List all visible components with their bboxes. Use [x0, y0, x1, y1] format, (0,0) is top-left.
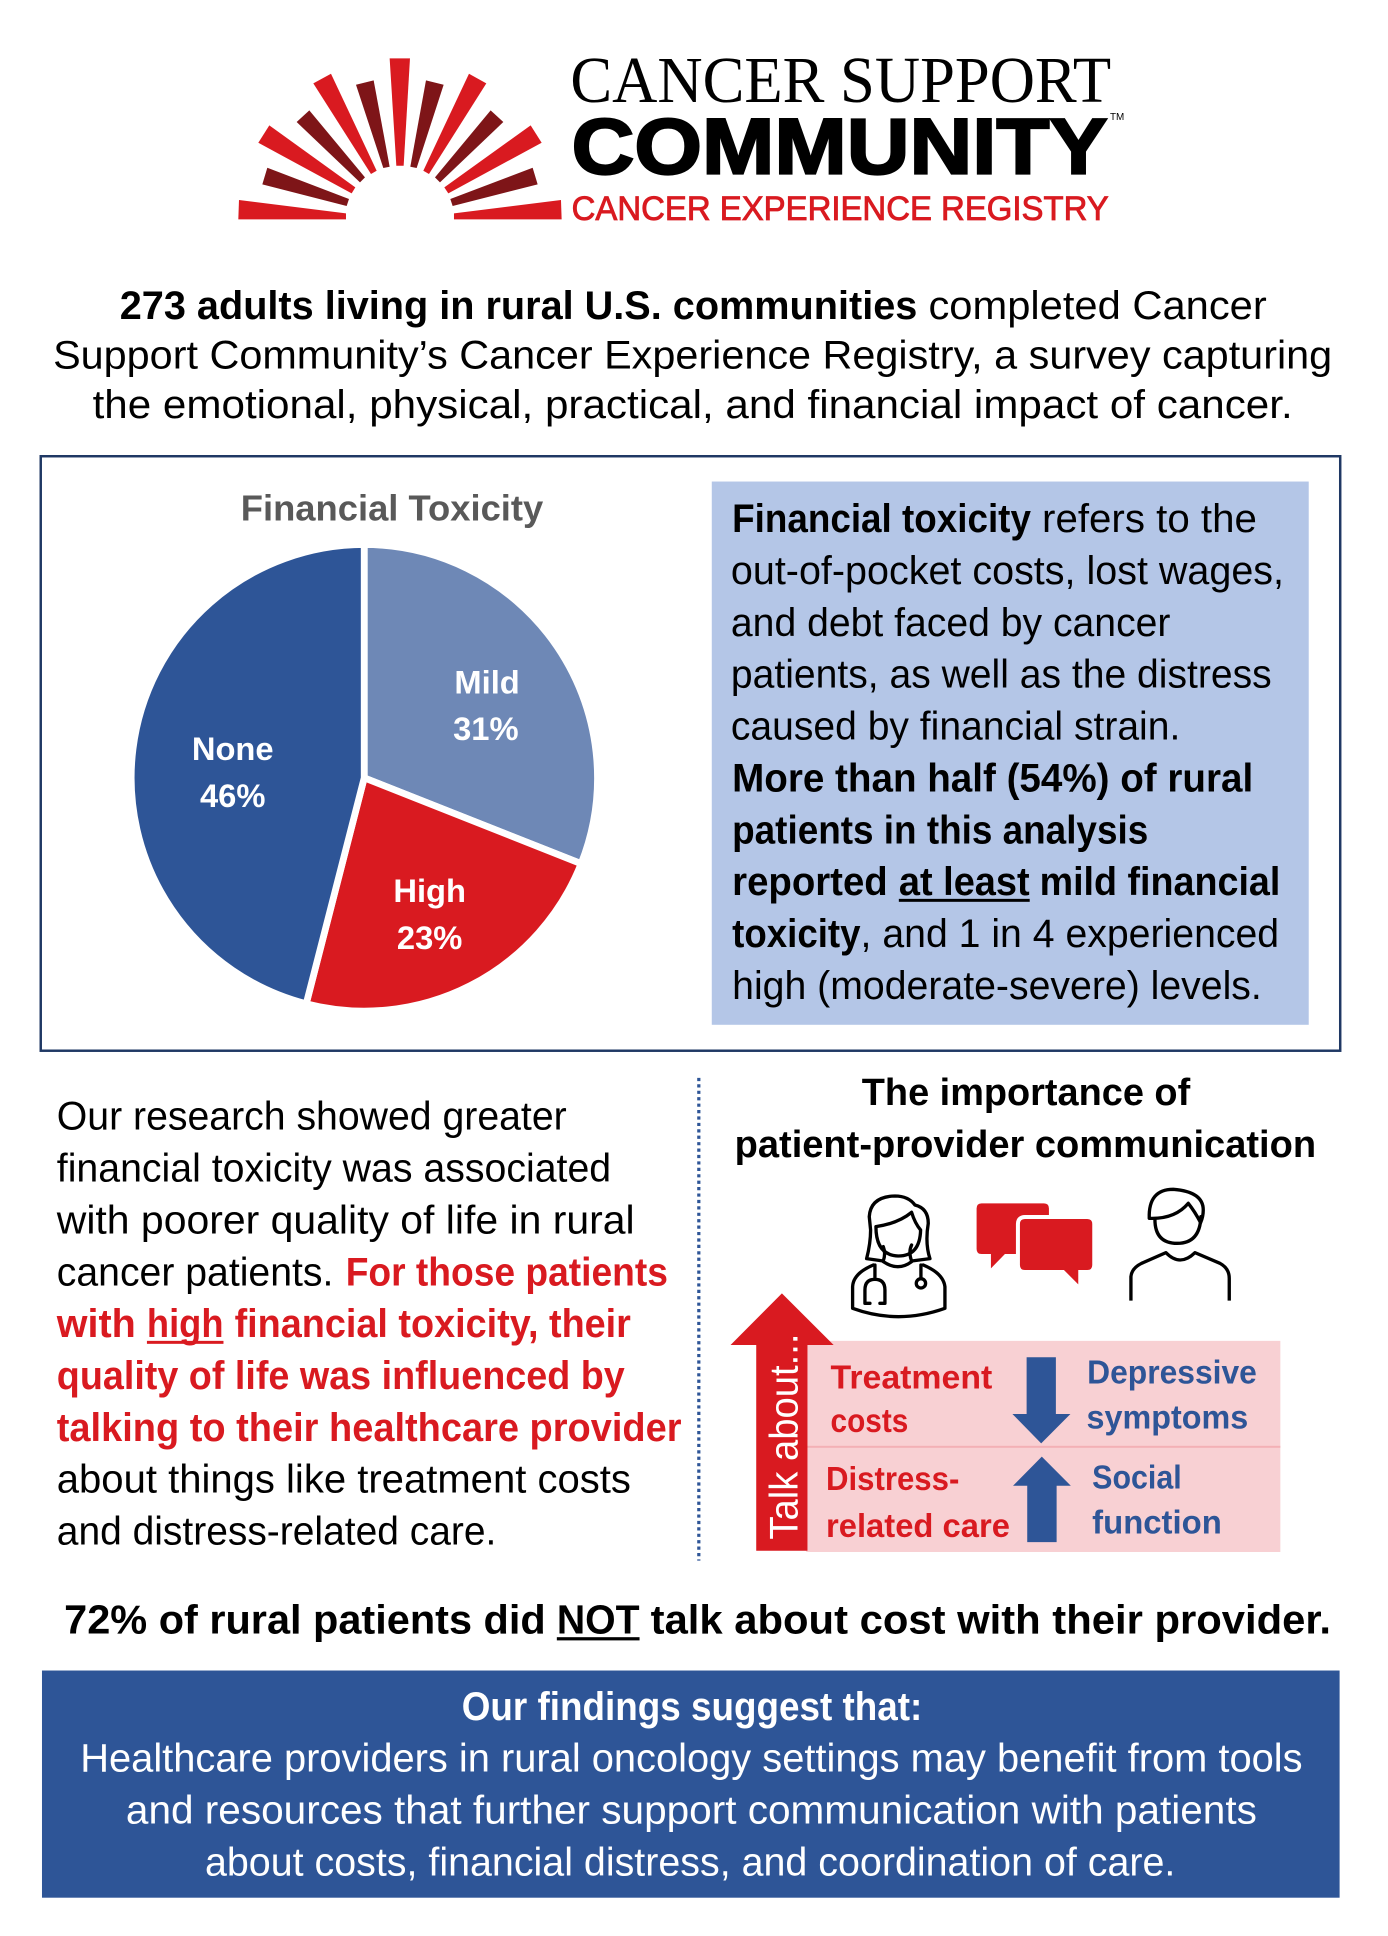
label: high: 23% — [397, 919, 462, 956]
key statistic statement: NOT — [557, 1596, 640, 1642]
label: treatment costs — [831, 1359, 992, 1440]
intro text block: the emotional, physical, practical, and financial impact of cancer. — [93, 383, 1293, 427]
callout: definition of financial toxicity: mild financial — [1040, 860, 1280, 904]
intro text block: Support Community’s Cancer Experience Registry, a survey capturing — [53, 334, 1332, 378]
icon: doctor — [853, 1196, 945, 1317]
logo text: Community: COMMUNITY — [572, 101, 1107, 190]
callout: definition of financial toxicity: toxicity — [732, 912, 861, 956]
panel: findings conclusion: and resources that further support communication with patients — [126, 1789, 1257, 1833]
callout: definition of financial toxicity: and debt faced by cancer — [731, 601, 1170, 645]
label: depressive symptoms: Depressive — [1087, 1354, 1257, 1391]
arrow: down — [1012, 1357, 1070, 1443]
callout: definition of financial toxicity: caused by financial strain. — [731, 705, 1180, 749]
label: depressive symptoms — [1086, 1354, 1257, 1436]
callout: definition of financial toxicity: More than half (54%) of rural — [732, 756, 1253, 800]
intro text block — [53, 284, 1332, 427]
icon: patient — [1131, 1189, 1229, 1301]
panel: findings conclusion: Healthcare providers in rural oncology settings may benefit from tools — [80, 1737, 1303, 1781]
logo text: Cancer Experience Registry: CANCER EXPERIENCE REGISTRY — [572, 190, 1109, 228]
callout: definition of financial toxicity: Financial toxicity — [732, 497, 1031, 541]
heading: The importance of — [862, 1071, 1190, 1114]
callout: definition of financial toxicity: , and 1 in 4 experienced — [861, 912, 1279, 956]
label: none: None — [192, 730, 274, 767]
label: distress-related care: Distress- — [826, 1461, 959, 1498]
icon: sunburst rays — [238, 58, 562, 219]
research findings text block: with poorer quality of life in rural — [56, 1198, 635, 1242]
pie chart — [131, 545, 598, 1011]
callout: definition of financial toxicity: high (moderate-severe) levels. — [732, 964, 1262, 1008]
callout: definition of financial toxicity: at least — [899, 860, 1030, 904]
label: social function: function — [1092, 1504, 1222, 1541]
logo text: Cancer Support: CANCER SUPPORT — [570, 45, 1111, 117]
chart title: Financial Toxicity — [241, 488, 543, 528]
arrow: talk about — [731, 1293, 834, 1551]
table: talk about outcomes — [731, 1293, 1280, 1552]
logo: Cancer Support Community — [238, 45, 1124, 228]
research findings text block: For those patients — [346, 1250, 668, 1294]
label: treatment costs: Treatment — [831, 1359, 992, 1396]
label: distress-related care — [826, 1461, 1010, 1545]
slice: high 23% — [306, 778, 581, 1011]
intro text block: 273 adults living in rural U.S. communities — [120, 284, 917, 328]
heading — [735, 1071, 1316, 1166]
research findings text block: about things like treatment costs — [57, 1458, 631, 1502]
research findings text block: and distress-related care. — [57, 1510, 496, 1554]
callout: definition of financial toxicity: patients, as well as the distress — [731, 653, 1272, 697]
label: mild: Mild — [454, 663, 520, 700]
callout: definition of financial toxicity: out-of-pocket costs, lost wages, — [731, 549, 1284, 593]
research findings text block: cancer patients. — [57, 1250, 333, 1294]
research findings text block — [56, 1095, 682, 1554]
research findings text block: high — [147, 1302, 223, 1346]
key statistic statement — [64, 1596, 1331, 1642]
callout: definition of financial toxicity: reported — [732, 860, 888, 904]
label: treatment costs: costs — [831, 1403, 908, 1440]
label: social function: Social — [1092, 1459, 1182, 1496]
arrow: talk about: Talk about... — [763, 1333, 807, 1540]
label: distress-related care: related care — [826, 1508, 1010, 1545]
slice: none 46% — [131, 545, 364, 1004]
key statistic statement: 72% of rural patients did — [64, 1596, 546, 1642]
label: depressive symptoms: symptoms — [1086, 1399, 1248, 1436]
panel: patient-provider communication — [731, 1071, 1316, 1552]
logo text: trademark: TM — [1110, 112, 1124, 123]
research findings text block: quality of life was influenced by — [57, 1354, 625, 1398]
callout: definition of financial toxicity — [712, 482, 1309, 1025]
panel: findings conclusion — [42, 1671, 1340, 1898]
research findings text block: with — [56, 1302, 136, 1346]
panel: findings conclusion: Our findings suggest that: — [462, 1685, 922, 1729]
panel: financial toxicity — [41, 456, 1340, 1051]
research findings text block: financial toxicity was associated — [57, 1147, 611, 1191]
heading: patient-provider communication — [735, 1123, 1316, 1166]
key statistic statement: talk about cost with their provider. — [651, 1596, 1331, 1642]
label: mild: 31% — [453, 710, 519, 747]
icon: speech bubbles — [977, 1203, 1092, 1284]
label: high: High — [393, 872, 466, 909]
callout: definition of financial toxicity: refers to the — [1042, 497, 1257, 541]
slice: mild 31% — [364, 545, 598, 864]
callout: definition of financial toxicity: patients in this analysis — [732, 808, 1148, 852]
arrow: up — [1013, 1457, 1071, 1542]
label: social function — [1092, 1459, 1222, 1541]
panel: findings conclusion: about costs, financial distress, and coordination of care. — [205, 1840, 1175, 1884]
intro text block: completed Cancer — [928, 284, 1267, 328]
research findings text block: financial toxicity, their — [235, 1302, 631, 1346]
label: none: 46% — [200, 777, 265, 814]
research findings text block: talking to their healthcare provider — [57, 1406, 682, 1450]
research findings text block: Our research showed greater — [57, 1095, 567, 1139]
